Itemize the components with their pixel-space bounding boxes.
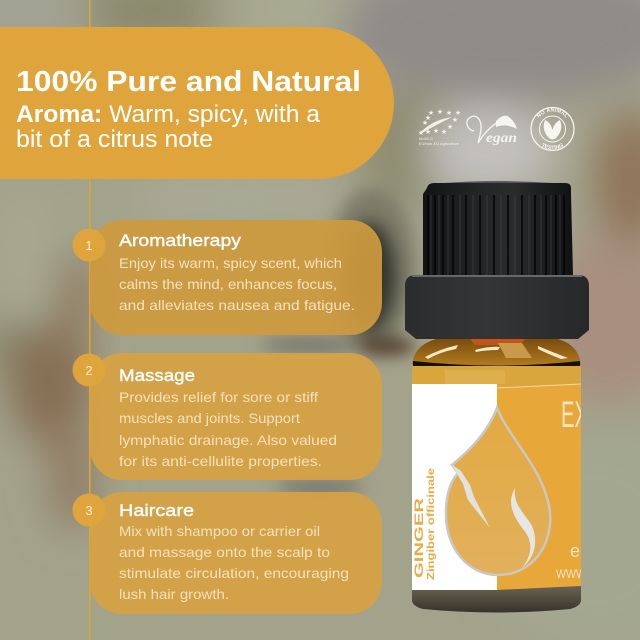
text: aromatherapy body: Enjoy its warm, spicy scent, which bbox=[119, 255, 342, 271]
text: haircare body bbox=[119, 523, 349, 602]
number badge 1: 1 bbox=[85, 238, 93, 253]
heading: Massage: Massage bbox=[119, 366, 195, 385]
text: haircare body: Mix with shampoo or carrier oil bbox=[119, 523, 320, 539]
panel: aromatherapy card bbox=[72, 220, 382, 335]
icon: EU organic leaf logo: ★ bbox=[425, 128, 431, 136]
text: massage body bbox=[119, 389, 337, 469]
number badge 2 bbox=[72, 354, 106, 386]
icon: EU organic leaf logo: ★ bbox=[418, 129, 424, 137]
icon: EU organic leaf logo: ★ bbox=[446, 109, 452, 117]
icon: no animal testing seal: TESTING bbox=[542, 143, 564, 150]
icon: EU organic leaf logo: BIO-BIO-21 bbox=[419, 136, 434, 141]
number badge 1 bbox=[72, 228, 106, 262]
label text: website: WWW bbox=[556, 567, 587, 581]
label text: website: e bbox=[570, 541, 580, 561]
label text: website bbox=[556, 547, 581, 578]
text: haircare body: stimulate circulation, encouraging bbox=[119, 565, 349, 581]
panel: massage card bbox=[72, 353, 382, 480]
text: aromatherapy body: calms the mind, enhances focus, bbox=[119, 276, 337, 292]
panel: title banner bbox=[0, 27, 394, 179]
text: massage body: muscles and joints. Support bbox=[119, 410, 300, 426]
number badge 3: 3 bbox=[85, 503, 93, 518]
label: orange side bbox=[497, 384, 581, 590]
icon: Vegan logo bbox=[467, 116, 517, 146]
text: aroma description: bit of a citrus note bbox=[16, 126, 213, 153]
number badge 3 bbox=[72, 494, 106, 526]
text: aromatherapy body bbox=[119, 255, 355, 313]
label text: Zingiber officinale: Zingiber officinale bbox=[426, 467, 437, 580]
text: massage body: for its anti-cellulite properties. bbox=[119, 453, 322, 469]
heading: Haircare: Haircare bbox=[119, 501, 194, 520]
panel: haircare card bbox=[72, 492, 382, 614]
icon: EU organic leaf logo: ★ bbox=[455, 109, 461, 117]
icon: oil drop bbox=[446, 408, 550, 575]
heading: Aromatherapy: Aromatherapy bbox=[119, 231, 242, 250]
text: haircare body: lush hair growth. bbox=[119, 586, 229, 602]
icon: no animal testing seal: NO ANIMAL bbox=[536, 108, 567, 118]
vertical timeline line bbox=[89, 0, 91, 640]
icon: EU organic leaf logo: ★ bbox=[452, 116, 458, 124]
icon: EU organic leaf logo: ★ bbox=[437, 108, 443, 116]
text: aromatherapy body: and alleviates nausea and fatigue. bbox=[119, 297, 355, 313]
label: white side bbox=[412, 384, 497, 590]
icon: EU organic leaf logo: ★ bbox=[422, 119, 428, 127]
icon: EU organic leaf logo: ★ bbox=[447, 123, 453, 131]
label text: GINGER: GINGER bbox=[414, 497, 426, 578]
icon: EU organic leaf logo: EU/non-EU Agriculture bbox=[419, 141, 460, 146]
icon: Vegan logo: egan bbox=[486, 131, 517, 146]
number badge 2: 2 bbox=[85, 363, 93, 378]
text: massage body: lymphatic drainage. Also valued bbox=[119, 432, 337, 448]
heading: 100% Pure and Natural: 100% Pure and Natural bbox=[16, 66, 361, 98]
icon: EU organic leaf logo: ★ bbox=[441, 128, 447, 136]
icon: no animal testing seal bbox=[530, 106, 575, 152]
bottle glass and label bbox=[412, 339, 588, 613]
bottle cap body bbox=[423, 181, 573, 276]
text: aroma description: Aroma: Warm, spicy, with a bbox=[16, 101, 321, 128]
text: massage body: Provides relief for sore or stiff bbox=[119, 389, 318, 405]
icon: EU organic leaf logo: ★ bbox=[433, 127, 439, 135]
icon: EU organic leaf logo: ★ bbox=[425, 114, 431, 122]
product bottle bbox=[405, 181, 589, 613]
text: aroma description bbox=[16, 101, 321, 153]
bottle cap ring bbox=[405, 275, 589, 339]
text: haircare body: and massage onto the scalp to bbox=[119, 544, 330, 560]
icon: EU organic leaf logo: ★ bbox=[428, 109, 434, 117]
icon: EU organic leaf logo bbox=[418, 108, 461, 146]
label text: brand: EX bbox=[561, 394, 588, 435]
